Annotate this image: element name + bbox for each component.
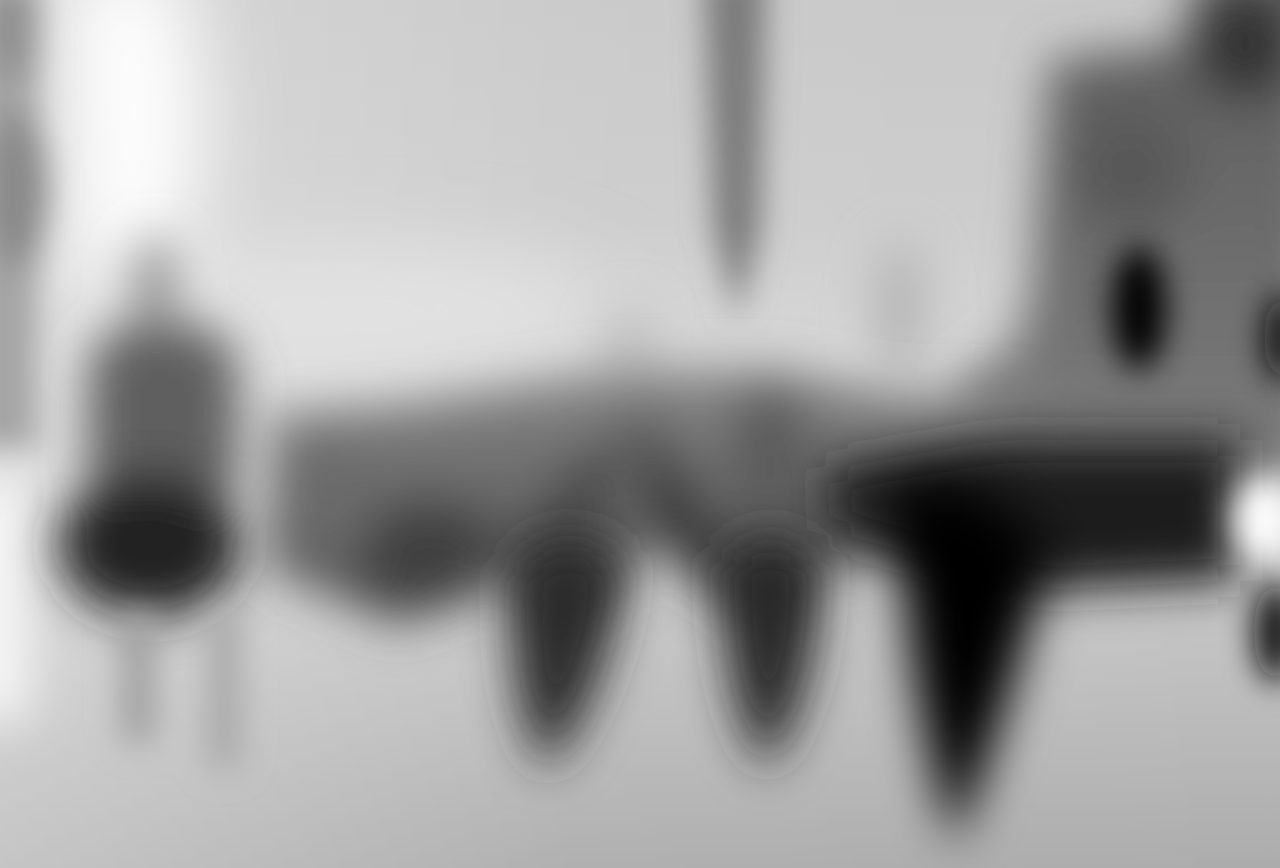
building dark openings xyxy=(1112,246,1280,382)
dark drip one xyxy=(511,537,625,770)
right building xyxy=(960,0,1280,480)
top centre vertical strip xyxy=(704,0,766,320)
dark drip three xyxy=(895,482,1050,845)
left edge column xyxy=(0,0,48,450)
dark lower right blob xyxy=(1254,582,1280,682)
faint spires xyxy=(608,240,924,390)
left edge bright strip xyxy=(0,480,30,720)
dark right band xyxy=(825,440,1240,590)
left figure xyxy=(58,237,242,617)
dark drip two xyxy=(722,535,820,770)
middle band xyxy=(270,370,1020,640)
figure legs xyxy=(120,610,242,770)
white blob xyxy=(1235,478,1280,562)
bright sky glow xyxy=(65,0,610,370)
